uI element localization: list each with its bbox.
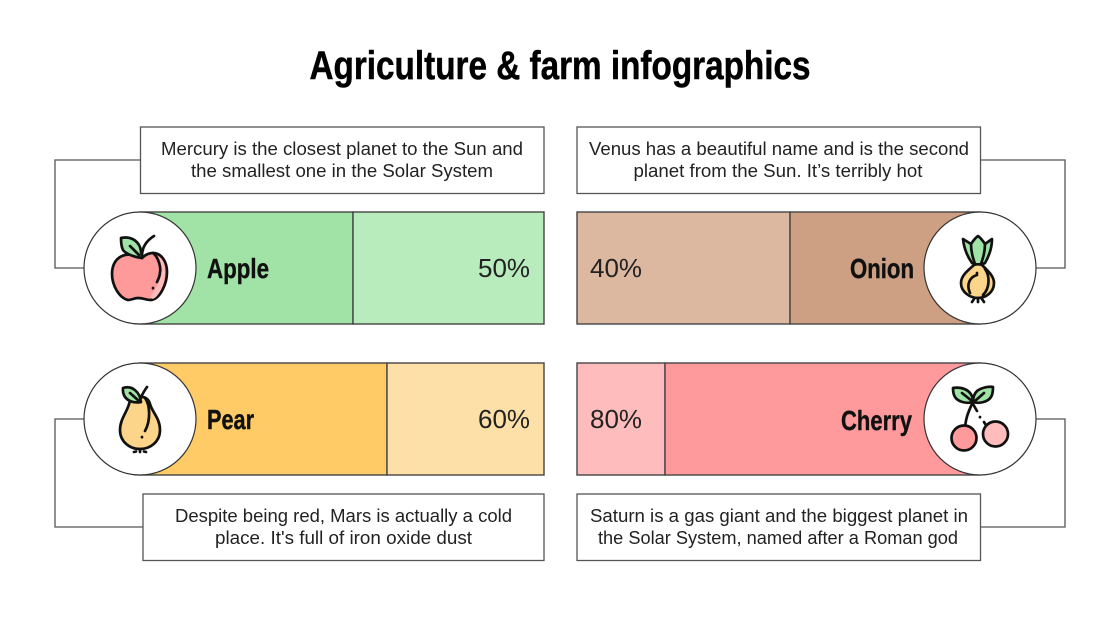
label: pear: Pear xyxy=(207,404,254,435)
bar: pear 60%: 60% xyxy=(478,404,530,434)
bar: pear 60% xyxy=(140,363,544,475)
text box: mars xyxy=(143,494,544,560)
bar: apple 50%: 50% xyxy=(478,253,530,283)
label: apple: Apple xyxy=(207,253,269,284)
text box: venus: planet from the Sun. It’s terribly hot xyxy=(634,161,922,181)
panel: onion xyxy=(577,127,1065,324)
bar: onion 40%: 40% xyxy=(590,253,642,283)
icon: cherry xyxy=(924,363,1036,475)
text box: saturn: the Solar System, named after a Roman god xyxy=(598,528,958,548)
panel: pear xyxy=(55,363,544,560)
text box: venus: Venus has a beautiful name and is the second xyxy=(589,139,969,159)
bar: apple 50% xyxy=(140,212,544,324)
title: Agriculture & farm infographics xyxy=(310,44,810,88)
label: cherry: Cherry xyxy=(841,405,912,436)
panel: apple xyxy=(55,127,544,324)
panel: cherry xyxy=(577,363,1065,560)
text box: venus xyxy=(577,127,980,194)
connector: cherry xyxy=(981,419,1065,527)
connector: apple xyxy=(55,160,140,268)
icon: onion xyxy=(924,212,1036,324)
text box: mercury xyxy=(140,127,544,194)
text box: mercury: the smallest one in the Solar System xyxy=(191,161,493,181)
bar: onion 40% xyxy=(577,212,980,324)
text box: mars: Despite being red, Mars is actually a cold xyxy=(175,506,512,526)
label: onion: Onion xyxy=(850,253,914,284)
connector: onion xyxy=(981,160,1065,268)
connector: pear xyxy=(55,419,143,527)
text box: mars: place. It's full of iron oxide dust xyxy=(215,528,472,548)
text box: saturn: Saturn is a gas giant and the biggest planet in xyxy=(590,506,968,526)
icon: pear xyxy=(84,363,196,475)
bar: cherry 80%: 80% xyxy=(590,404,642,434)
bar: cherry 80% xyxy=(577,363,980,475)
icon: apple xyxy=(84,212,196,324)
text box: mercury: Mercury is the closest planet to the Sun and xyxy=(161,139,523,159)
text box: saturn xyxy=(577,494,980,560)
